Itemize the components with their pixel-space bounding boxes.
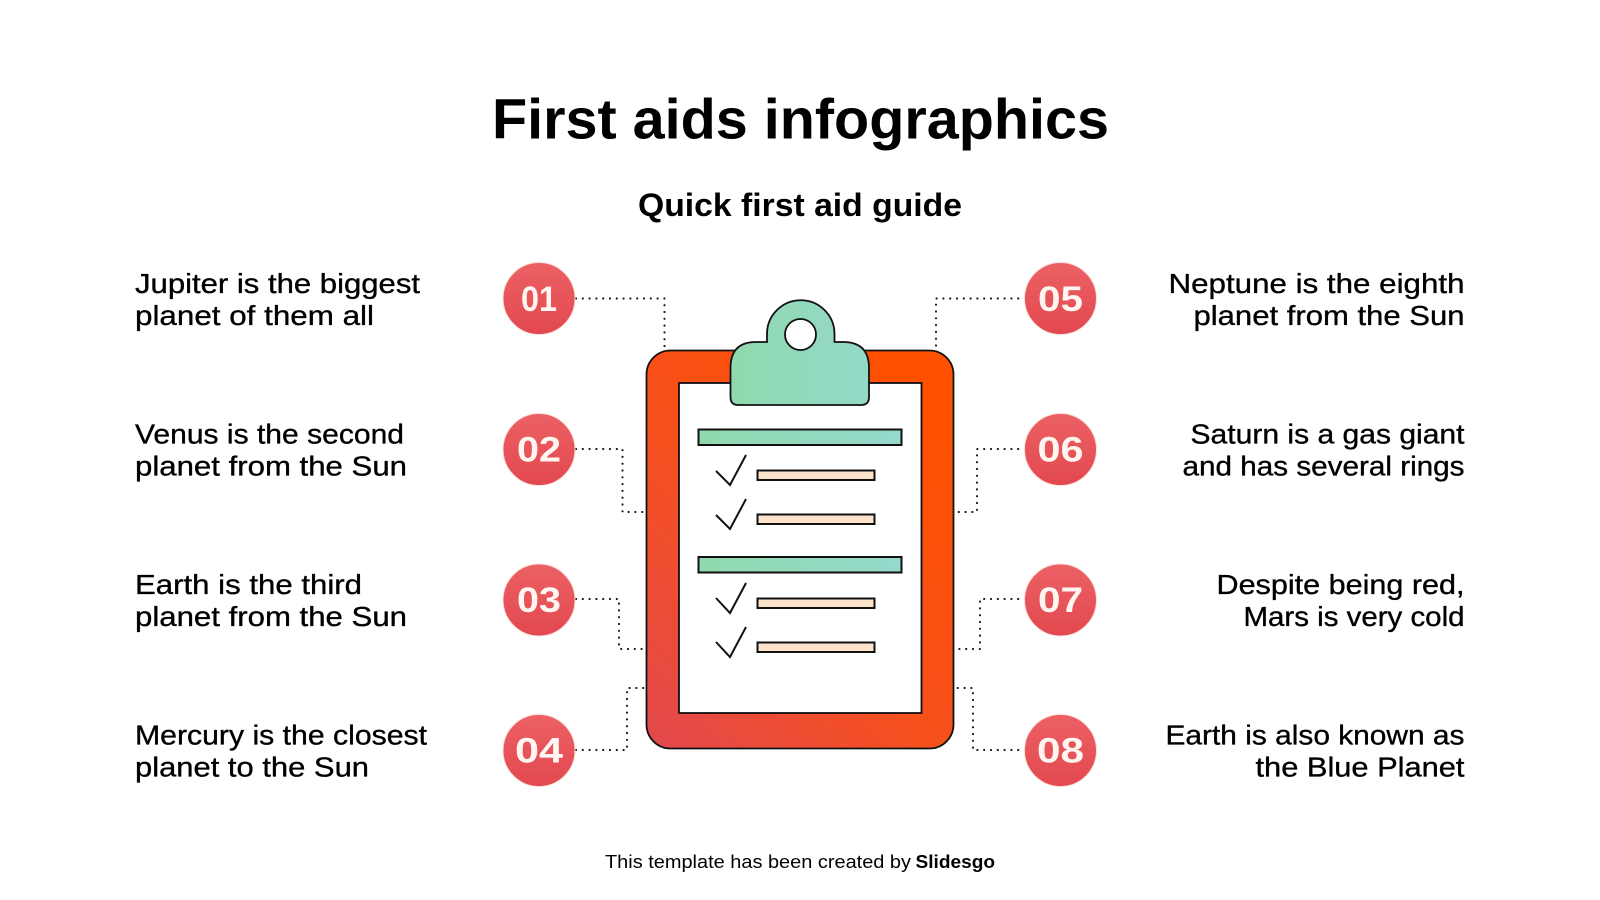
clipboard illustration: [646, 300, 954, 748]
text 02: planet from the Sun: [135, 450, 407, 482]
item 08: [1024, 714, 1465, 786]
text 06: and has several rings: [1182, 450, 1464, 482]
text 08: Earth is also known as: [1166, 720, 1464, 750]
text 07: Mars is very cold: [1244, 601, 1464, 632]
text 01: planet of them all: [135, 300, 374, 331]
number 07: 07: [1038, 581, 1083, 620]
check mark 2: [716, 499, 746, 529]
check mark 1: [716, 455, 746, 485]
check mark 3: [716, 583, 746, 613]
item bar 1: [758, 470, 874, 480]
checklist heading bar 2: [698, 557, 902, 572]
text 08: the Blue Planet: [1256, 752, 1465, 782]
clipboard frame: [646, 350, 954, 748]
number 08: 08: [1037, 732, 1084, 770]
item 07: [1024, 564, 1464, 636]
number 03: 03: [517, 581, 561, 620]
number 01: 01: [521, 280, 557, 319]
text 03: Earth is the third: [135, 569, 362, 600]
text 01: Jupiter is the biggest: [135, 268, 420, 299]
text 07: Despite being red,: [1216, 569, 1464, 600]
number 02: 02: [517, 430, 561, 470]
item 04: [135, 714, 575, 786]
connector lines: [576, 298, 1025, 750]
badge 01: [503, 262, 575, 334]
footer credit: This template has been created by: [605, 852, 911, 872]
footer credit: Slidesgo: [916, 852, 995, 872]
text 05: Neptune is the eighth: [1168, 268, 1464, 299]
subtitle: Quick first aid guide: [638, 187, 962, 223]
item bar 2: [758, 514, 874, 524]
text 03: planet from the Sun: [135, 601, 407, 632]
text 05: planet from the Sun: [1194, 300, 1464, 331]
item 02: [135, 414, 575, 486]
paper sheet: [679, 383, 922, 713]
clip: [730, 300, 869, 405]
checklist heading bar 1: [698, 430, 902, 445]
number 05: 05: [1038, 280, 1083, 319]
number 06: 06: [1038, 430, 1084, 470]
badge 06: [1024, 414, 1096, 486]
badge 07: [1024, 564, 1096, 636]
badge 04: [503, 714, 575, 786]
item 05: [1024, 262, 1464, 334]
item bar 3: [758, 598, 874, 608]
item 01: [135, 262, 575, 334]
item bar 4: [758, 642, 874, 652]
item 03: [135, 564, 575, 636]
check mark 4: [716, 627, 746, 657]
title: First aids infographics: [492, 88, 1109, 152]
number 04: 04: [515, 732, 564, 770]
text 04: planet to the Sun: [135, 752, 369, 782]
badge 08: [1024, 714, 1096, 786]
item 06: [1024, 414, 1465, 486]
text 02: Venus is the second: [135, 418, 404, 450]
badge 03: [503, 564, 575, 636]
badge 05: [1024, 262, 1096, 334]
badge 02: [503, 414, 575, 486]
text 06: Saturn is a gas giant: [1190, 418, 1465, 450]
text 04: Mercury is the closest: [135, 720, 427, 750]
